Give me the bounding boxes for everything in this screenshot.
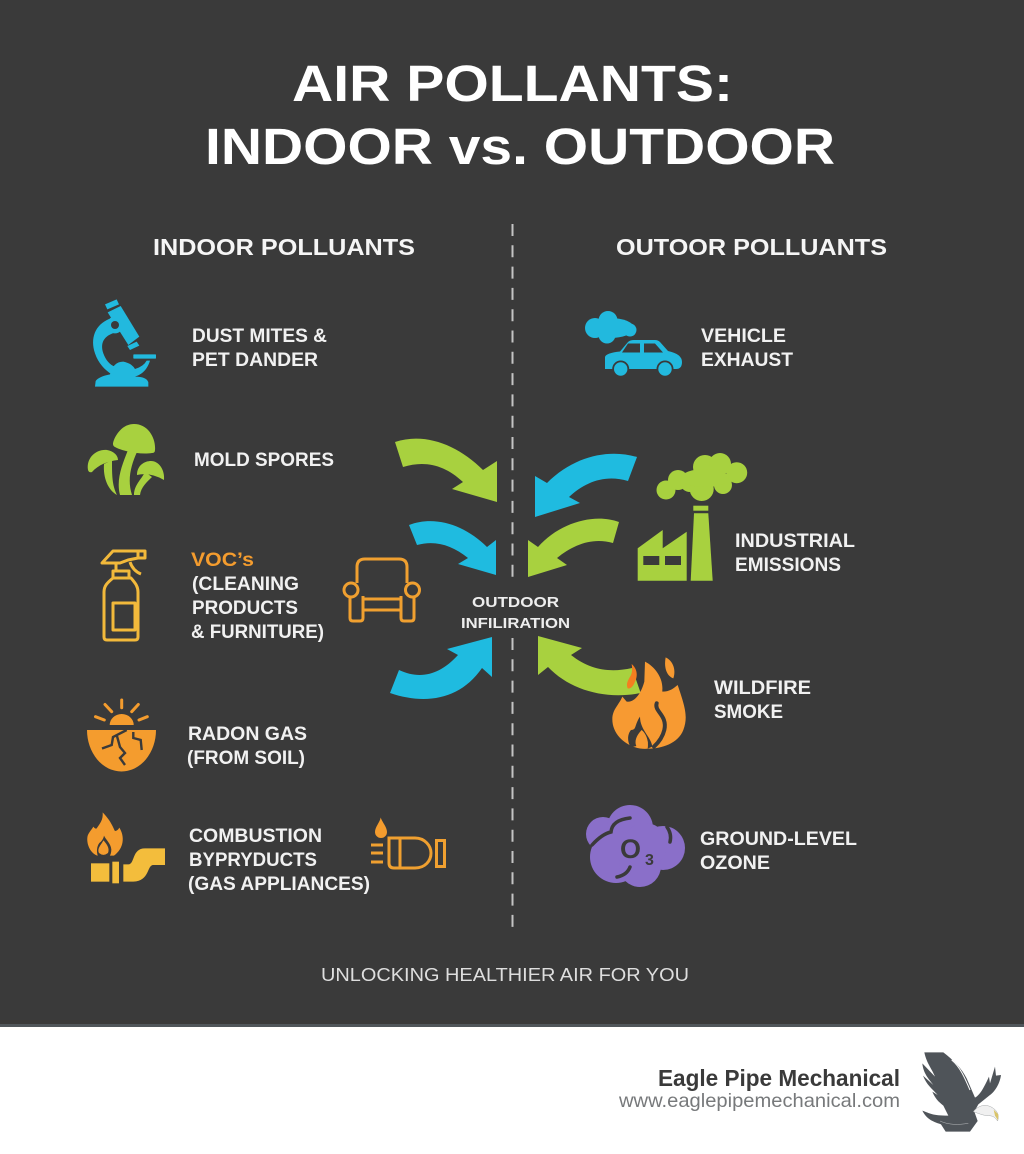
icon: flame and pipe xyxy=(87,812,165,883)
label: ground-level ozone xyxy=(700,828,857,874)
icon: radon soil and sun xyxy=(87,700,156,771)
label: dust mites and pet dander xyxy=(192,325,327,371)
label: ground-level ozone: GROUND-LEVEL xyxy=(700,828,857,850)
label: vehicle exhaust: EXHAUST xyxy=(701,349,793,371)
label: vehicle exhaust xyxy=(701,325,793,371)
label: VOCs: (CLEANING xyxy=(192,573,299,595)
label: mold spores: MOLD SPORES xyxy=(194,449,334,471)
label: combustion byproducts: COMBUSTION xyxy=(189,825,322,847)
arrow: green top left xyxy=(395,439,497,502)
label: dust mites and pet dander: DUST MITES & xyxy=(192,325,327,347)
label: industrial emissions xyxy=(735,530,855,576)
website: www.eaglepipemechanical.com xyxy=(618,1090,900,1112)
label: outdoor infiltration xyxy=(461,594,570,632)
label: outdoor infiltration: INFILIRATION xyxy=(461,615,570,632)
company name: Eagle Pipe Mechanical xyxy=(658,1065,900,1091)
arrow: green middle right xyxy=(528,519,619,577)
arrow: green bottom right xyxy=(538,636,641,695)
title xyxy=(205,55,835,175)
logo: eagle xyxy=(922,1052,1001,1132)
arrow: blue bottom left xyxy=(390,637,492,699)
title: INDOOR vs. OUTDOOR xyxy=(205,118,835,175)
icon: wildfire flame xyxy=(612,657,686,749)
heading: outdoor pollutants: OUTOOR POLLUANTS xyxy=(616,234,887,260)
label: industrial emissions: INDUSTRIAL xyxy=(735,530,855,552)
icon: mushrooms xyxy=(88,424,164,495)
label: wildfire smoke: SMOKE xyxy=(714,701,783,723)
label: radon gas: RADON GAS xyxy=(188,723,307,745)
label: vehicle exhaust: VEHICLE xyxy=(701,325,786,347)
icon: microscope xyxy=(93,299,156,387)
label: VOCs xyxy=(191,549,324,643)
panel: outdoor pollutants xyxy=(585,311,857,887)
label: wildfire smoke: WILDFIRE xyxy=(714,677,811,699)
icon: car and exhaust cloud xyxy=(585,311,682,378)
icon: ozone cloud: O xyxy=(620,834,641,864)
arrow: blue top right xyxy=(535,454,637,517)
icon: ozone cloud xyxy=(586,805,685,887)
label: combustion byproducts: (GAS APPLIANCES) xyxy=(188,873,370,895)
tagline: UNLOCKING HEALTHIER AIR FOR YOU xyxy=(321,964,689,985)
label: VOCs: PRODUCTS xyxy=(192,597,298,619)
label: radon gas xyxy=(187,723,307,769)
icon: armchair xyxy=(344,559,420,621)
icon: gas burner xyxy=(371,818,444,868)
icon: spray bottle xyxy=(102,551,145,640)
footer xyxy=(0,1024,1024,1154)
label: combustion byproducts xyxy=(188,825,370,895)
label: VOCs: & FURNITURE) xyxy=(191,621,324,643)
label: radon gas: (FROM SOIL) xyxy=(187,747,305,769)
label: outdoor infiltration: OUTDOOR xyxy=(472,594,559,611)
heading: indoor pollutants: INDOOR POLLUANTS xyxy=(153,234,415,260)
icon: factory xyxy=(638,453,747,581)
panel: indoor pollutants xyxy=(87,299,444,895)
label: industrial emissions: EMISSIONS xyxy=(735,554,841,576)
title: AIR POLLANTS: xyxy=(292,55,733,112)
icon: ozone cloud: 3 xyxy=(645,852,654,869)
label: dust mites and pet dander: PET DANDER xyxy=(192,349,318,371)
label: ground-level ozone: OZONE xyxy=(700,852,770,874)
label: combustion byproducts: BYPRYDUCTS xyxy=(189,849,317,871)
label: VOCs: VOC’s xyxy=(191,549,254,571)
arrows: outdoor infiltration xyxy=(390,439,641,699)
arrow: blue middle left xyxy=(409,521,496,575)
label: wildfire smoke xyxy=(714,677,811,723)
